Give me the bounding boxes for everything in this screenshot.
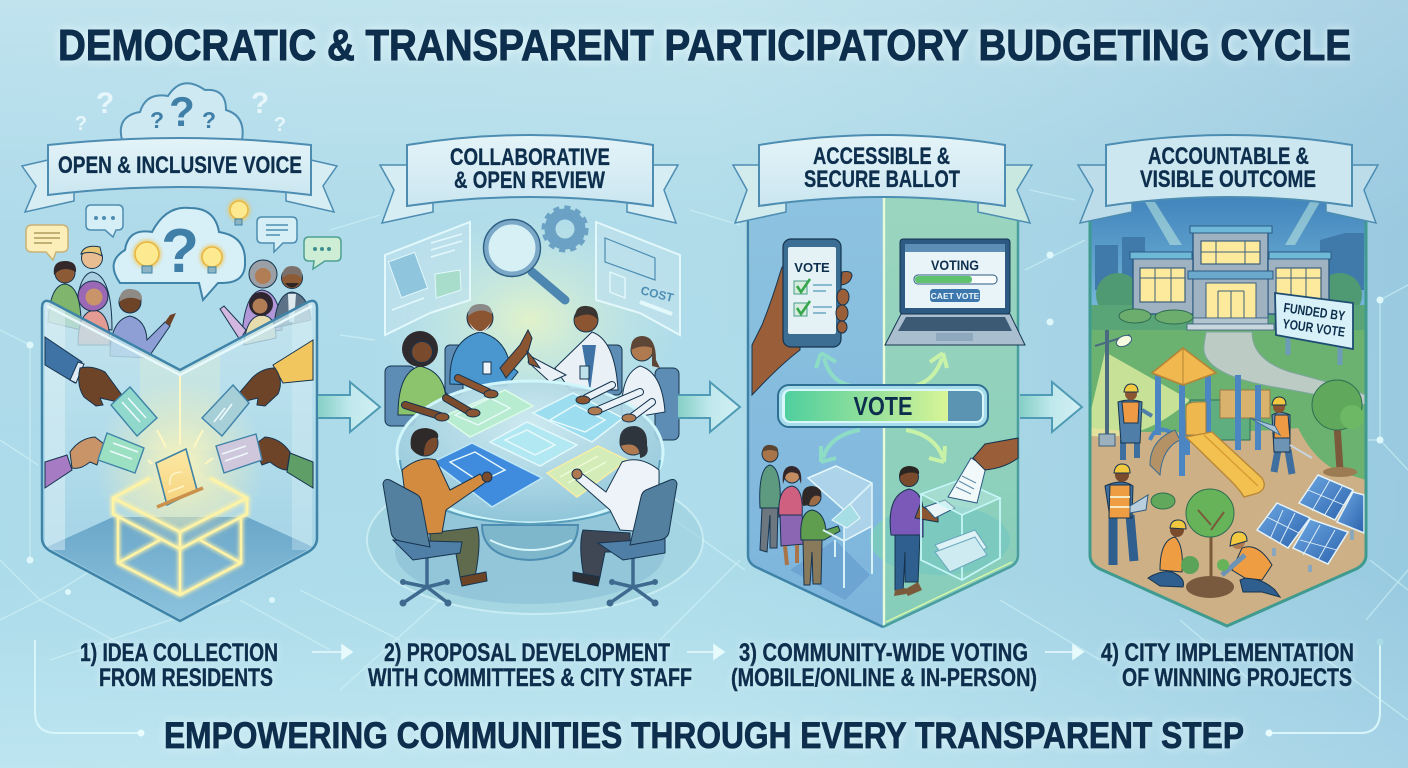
banner: collaborative review: COLLABORATIVE [450, 144, 610, 171]
seated committee front row [383, 426, 677, 606]
caption: step 3 [731, 639, 1037, 692]
icon: question cloud: ? [274, 114, 286, 136]
banner: collaborative review: & OPEN REVIEW [454, 167, 605, 194]
banner: accountable outcome [1078, 135, 1378, 223]
panel: proposal development [367, 208, 703, 614]
workers [1105, 384, 1312, 597]
arrow: caption 1 to 2 [312, 645, 352, 659]
vote progress bar: VOTE [854, 391, 912, 421]
icon: question cloud: ? [202, 107, 216, 133]
banner: accountable outcome: ACCOUNTABLE & [1148, 143, 1309, 170]
banner: open and inclusive voice [22, 138, 337, 212]
card: split shield [748, 150, 1020, 630]
icon: laptop [885, 239, 1025, 345]
arrow: step three to four [1020, 382, 1082, 432]
icon: question cloud: ? [150, 107, 164, 133]
playground [1150, 348, 1270, 497]
arrow: caption 2 to 3 [687, 645, 724, 659]
arrow: step two to three [678, 382, 740, 432]
review documents [385, 222, 680, 335]
round table with blueprints [397, 381, 663, 560]
caption: step 2: 2) PROPOSAL DEVELOPMENT [384, 639, 670, 667]
caption: step 3: 3) COMMUNITY-WIDE VOTING [739, 639, 1028, 667]
icon: magnifier [484, 220, 565, 300]
panel: city implementation [1085, 180, 1366, 626]
caption: step 2: WITH COMMITTEES & CITY STAFF [368, 664, 692, 692]
arrow: caption 3 to 4 [1045, 645, 1083, 659]
caption: step 3: (MOBILE/ONLINE & IN-PERSON) [731, 664, 1037, 692]
footer tagline: EMPOWERING COMMUNITIES THROUGH EVERY TRANSPARENT STEP [164, 715, 1244, 756]
panel: idea collection [26, 83, 341, 621]
banner: accessible ballot: ACCESSIBLE & [813, 143, 950, 170]
voting booth queue [760, 445, 872, 588]
caption: step 4: OF WINNING PROJECTS [1122, 664, 1352, 692]
funded by your vote sign [1275, 293, 1353, 365]
icon: question cloud: ? [96, 87, 114, 120]
street lamp [1095, 330, 1133, 446]
icon: question cloud: ? [169, 88, 195, 135]
arrow: step one to two [318, 382, 380, 432]
banner: accessible ballot [733, 135, 1032, 223]
caption: step 1 [80, 639, 278, 692]
people right group [220, 260, 311, 345]
funded by your vote sign: FUNDED BY [1283, 300, 1346, 324]
banner: open and inclusive voice: OPEN & INCLUSIVE VOICE [58, 152, 302, 179]
hands holding ballots [45, 337, 313, 488]
ballot box voter [890, 438, 1018, 596]
icon: gear [544, 208, 586, 250]
card: glass ballot chamber [42, 300, 317, 621]
caption: step 2 [368, 639, 692, 692]
icon: question cloud: ? [75, 113, 87, 135]
icon: light bulbs [135, 201, 248, 273]
review documents: COST [639, 283, 676, 305]
tree and shrubs [1151, 380, 1364, 509]
icon: question cloud: ? [251, 87, 269, 120]
icon: hand with phone [752, 239, 852, 395]
icon: hand with phone: VOTE [794, 260, 830, 275]
icon: question cloud [75, 83, 286, 140]
banner: accessible ballot: SECURE BALLOT [804, 166, 960, 193]
icon: glowing ballot box [113, 449, 247, 595]
funded by your vote sign: YOUR VOTE [1282, 316, 1346, 340]
banner: collaborative review [380, 135, 678, 223]
caption: step 1: FROM RESIDENTS [99, 664, 273, 692]
floor ring [367, 466, 703, 614]
panel: community voting [748, 150, 1025, 630]
speech bubbles [26, 205, 341, 269]
icon: lit ideas cloud: ? [161, 217, 199, 286]
scene clipped to shield [1085, 180, 1366, 626]
seated committee back row [385, 304, 679, 440]
ballot cards [98, 385, 262, 473]
icon: laptop: CAET VOTE [931, 291, 980, 301]
card outline [1090, 200, 1366, 626]
caption: step 1: 1) IDEA COLLECTION [80, 639, 278, 667]
people left group [48, 246, 176, 358]
banner: accountable outcome: VISIBLE OUTCOME [1140, 166, 1316, 193]
icon: lit ideas cloud [114, 208, 245, 300]
sapling [1186, 489, 1234, 598]
forearms resting on table [405, 378, 652, 422]
caption: step 4 [1101, 639, 1354, 692]
curved arrows [816, 353, 947, 462]
solar panels [1257, 475, 1364, 572]
vote progress bar [778, 385, 988, 427]
caption: step 4: 4) CITY IMPLEMENTATION [1101, 639, 1354, 667]
icon: laptop: VOTING [931, 257, 979, 273]
